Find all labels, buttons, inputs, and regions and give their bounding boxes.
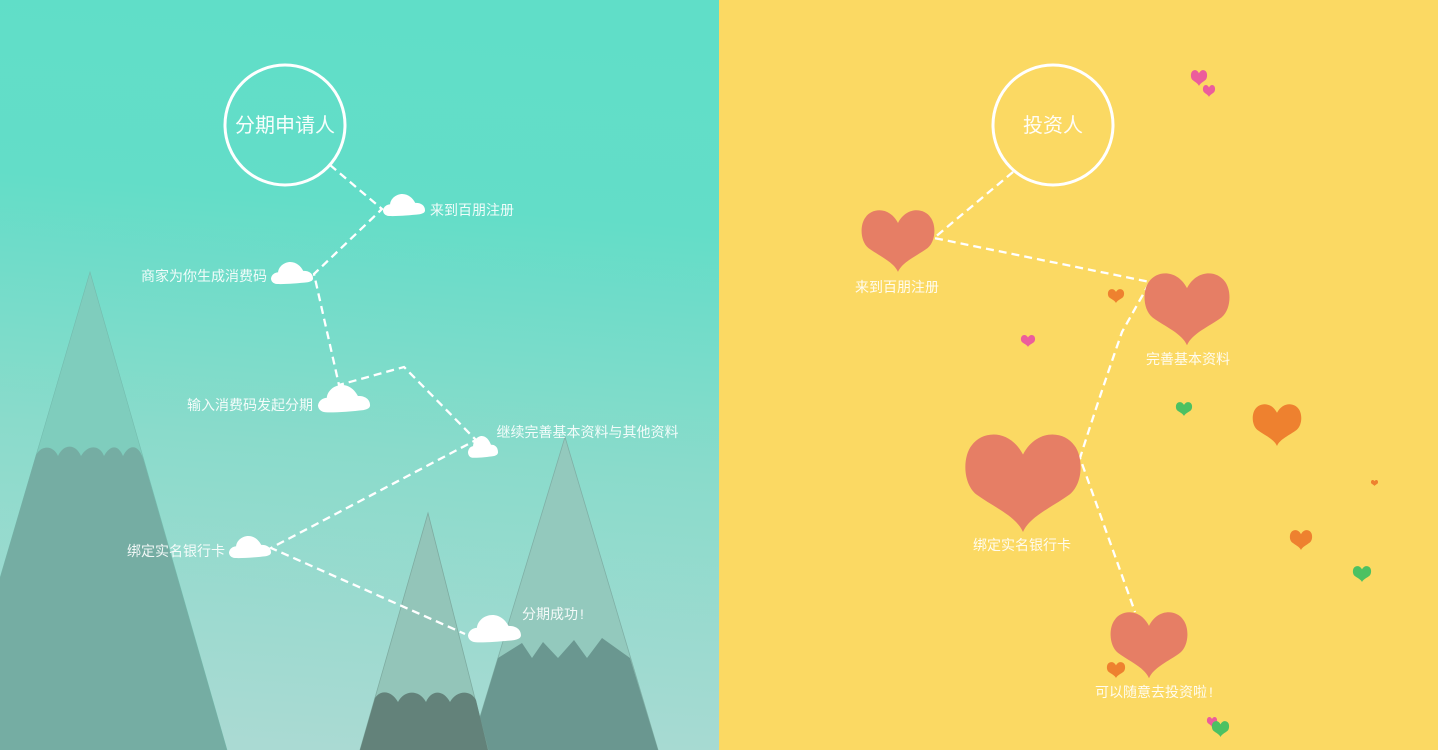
panel: applicant — [0, 0, 719, 750]
step 4: complete information: 继续完善基本资料与其他资料 — [496, 424, 678, 440]
step 2: complete information: 完善基本资料 — [1146, 351, 1230, 367]
step 1: register: 来到百朋注册 — [430, 202, 514, 218]
step 1: register — [383, 194, 514, 218]
step 3: bind bank card: 绑定实名银行卡 — [973, 537, 1071, 553]
dashed route: applicant — [271, 165, 476, 634]
circle: applicant: 分期申请人 — [235, 114, 335, 137]
step 6: success: 分期成功! — [522, 606, 584, 622]
dashed route: investor — [934, 172, 1150, 612]
step 2: complete information — [1145, 273, 1230, 367]
step 5: bind bank card: 绑定实名银行卡 — [127, 543, 225, 559]
panel: investor — [719, 0, 1438, 750]
step 4: invest: 可以随意去投资啦! — [1095, 684, 1213, 700]
step 4: invest — [1095, 612, 1213, 700]
panel background: yellow — [719, 0, 1438, 750]
step 6: success — [468, 606, 584, 642]
decorative small hearts — [1021, 70, 1378, 737]
panel background: sky — [0, 0, 719, 750]
step 3: start installment: 输入消费码发起分期 — [187, 397, 313, 413]
step 3: bind bank card — [965, 434, 1081, 553]
mountain: middle — [360, 513, 488, 750]
step 2: merchant code — [141, 262, 313, 284]
step 5: bind bank card — [127, 536, 271, 559]
step 3: start installment — [187, 385, 370, 413]
circle: investor: 投资人 — [1023, 114, 1083, 137]
step 2: merchant code: 商家为你生成消费码 — [141, 268, 267, 284]
icon: orange heart near final step — [1107, 662, 1125, 678]
mountain: left — [0, 272, 227, 750]
mountain: right — [470, 437, 658, 750]
circle: applicant — [225, 65, 345, 185]
circle: investor — [993, 65, 1113, 185]
step 1: register — [855, 210, 939, 295]
step 4: complete information — [468, 424, 678, 458]
step 1: register: 来到百朋注册 — [855, 279, 939, 295]
